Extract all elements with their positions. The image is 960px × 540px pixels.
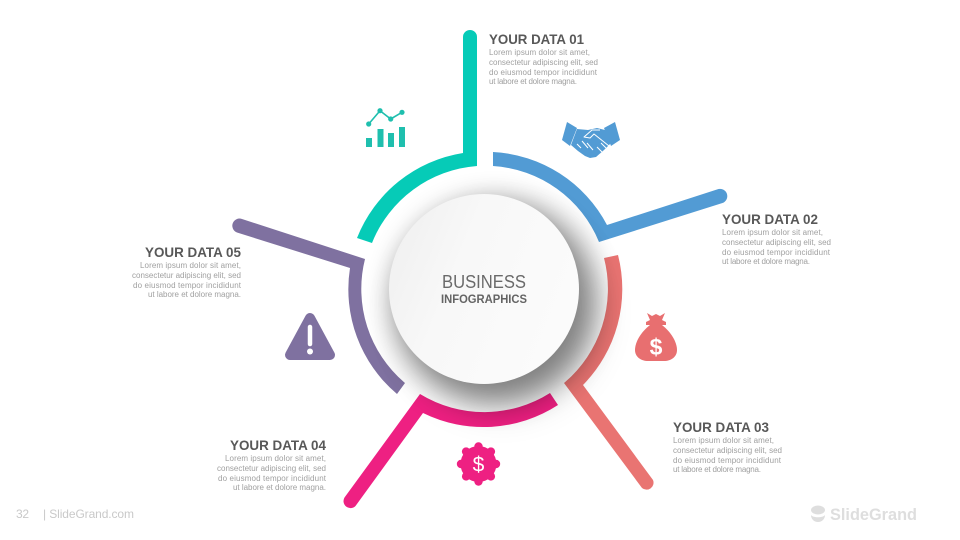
text block: data 03: ut labore et dolore magna. xyxy=(673,465,761,474)
icon: gear with dollar: $ xyxy=(473,454,485,476)
text block: data 04: YOUR DATA 04 xyxy=(230,437,326,453)
footer: logo: SlideGrand xyxy=(830,506,917,524)
text block: data 03 xyxy=(673,419,782,474)
text block: data 03: Lorem ipsum dolor sit amet, xyxy=(673,436,774,445)
text block: data 04: consectetur adipiscing elit, sed xyxy=(217,464,326,473)
text block: data 05: YOUR DATA 05 xyxy=(145,244,241,260)
text block: data 05: Lorem ipsum dolor sit amet, xyxy=(140,261,241,270)
text block: data 01: do eiusmod tempor incididunt xyxy=(489,68,598,77)
text block: data 02: ut labore et dolore magna. xyxy=(722,257,810,266)
text block: data 04: Lorem ipsum dolor sit amet, xyxy=(225,454,326,463)
icon: handshake xyxy=(562,122,620,158)
center title xyxy=(441,272,527,306)
segment 5: purple arc and bar xyxy=(232,219,405,394)
text block: data 02 xyxy=(722,211,831,266)
icon: money bag xyxy=(635,313,677,361)
text block: data 02: YOUR DATA 02 xyxy=(722,211,818,227)
text block: data 01 xyxy=(489,31,598,86)
text block: data 04: ut labore et dolore magna. xyxy=(233,483,326,492)
text block: data 04: do eiusmod tempor incididunt xyxy=(218,474,327,483)
text block: data 02: Lorem ipsum dolor sit amet, xyxy=(722,228,823,237)
icon: gear with dollar xyxy=(457,442,500,486)
center title: INFOGRAPHICS xyxy=(441,294,527,306)
text block: data 04 xyxy=(217,437,327,492)
icon: chart xyxy=(366,108,405,147)
text block: data 05: ut labore et dolore magna. xyxy=(148,290,241,299)
text block: data 05 xyxy=(132,244,242,299)
text block: data 01: consectetur adipiscing elit, sed xyxy=(489,58,598,67)
segment 1: teal arc and bar xyxy=(357,30,477,243)
text block: data 03: YOUR DATA 03 xyxy=(673,419,769,435)
text block: data 03: do eiusmod tempor incididunt xyxy=(673,456,782,465)
center disc with shadow xyxy=(389,194,600,412)
footer: page number and site: 32 xyxy=(16,507,29,521)
center title: BUSINESS xyxy=(442,272,526,292)
icon: money bag: $ xyxy=(650,334,663,360)
text block: data 05: do eiusmod tempor incididunt xyxy=(133,281,242,290)
segment 4: magenta arc and bar xyxy=(344,393,558,508)
segment 2: blue arc and bar xyxy=(493,152,727,242)
footer: page number and site: | SlideGrand.com xyxy=(43,507,134,521)
segment 3: coral arc and bar xyxy=(564,255,654,490)
icon: warning triangle xyxy=(290,318,330,355)
text block: data 01: YOUR DATA 01 xyxy=(489,31,584,47)
text block: data 03: consectetur adipiscing elit, sed xyxy=(673,446,782,455)
text block: data 01: Lorem ipsum dolor sit amet, xyxy=(489,48,590,57)
text block: data 05: consectetur adipiscing elit, sed xyxy=(132,271,241,280)
text block: data 02: do eiusmod tempor incididunt xyxy=(722,248,831,257)
text block: data 02: consectetur adipiscing elit, sed xyxy=(722,238,831,247)
text block: data 01: ut labore et dolore magna. xyxy=(489,77,577,86)
